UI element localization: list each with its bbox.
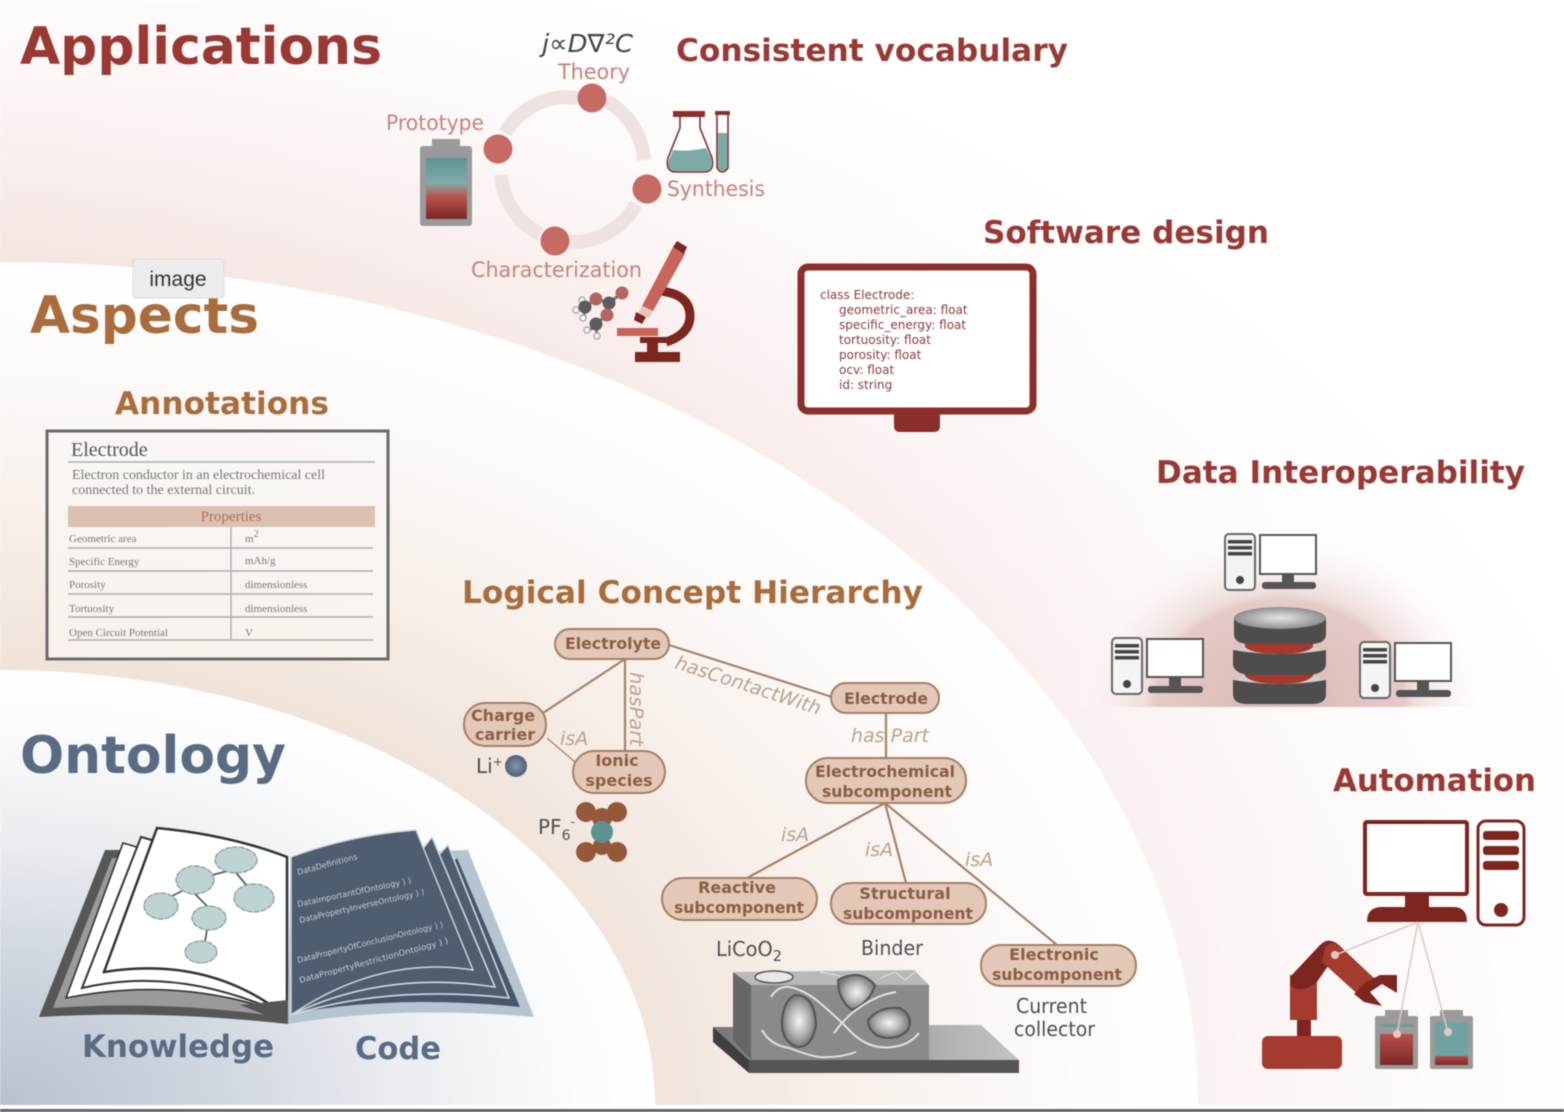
annotation card: dimensionless [245,603,307,615]
annotation card: Specific Energy [69,556,140,568]
node: Reactive subcomponent: subcomponent [674,898,804,917]
node: Ionic species [573,751,665,793]
edge label: isA structural: isA [865,839,893,861]
node: Charge carrier: Charge [471,706,535,725]
heading: Aspects: Aspects [30,286,259,346]
heading: Data Interoperability: Data Interoperability [1156,455,1525,491]
bottom edge line [0,1109,1564,1112]
icon: flask and test tube [667,111,730,172]
edge label: isA charge: isA [560,728,588,750]
icon: molecule [573,286,628,339]
icon: database [1233,607,1326,704]
annotation card: Electron conductor in an electrochemical cell [72,467,325,482]
node: Electrode [831,683,939,713]
label: Prototype: Prototype [386,111,484,135]
code listing [820,288,968,392]
heading: Ontology: Ontology [20,726,286,786]
node: Structural subcomponent: subcomponent [843,904,973,923]
icon: microscope [617,241,690,362]
panel: data interoperability [1112,455,1525,704]
knowledge graph on page [144,847,274,963]
code text on page: DataPropertyOfConclusionOntology ) ) [296,920,444,965]
edge label: has Part: has Part [851,725,931,747]
annotation card: Properties [201,509,262,525]
icon: computer top [1225,534,1316,590]
node: Reactive subcomponent: Reactive [698,878,776,897]
background: aspects band [0,262,1198,1105]
panel: automation [1262,763,1536,1069]
connections [1331,922,1452,1038]
label: LiCoO2: LiCoO [716,937,775,961]
node: Electrochemical subcomponent [806,758,966,803]
node: Electrolyte [555,629,669,659]
label: Characterization: Characterization [471,258,642,282]
node: Charge carrier: carrier [475,725,535,744]
edge label: isA reactive: isA [781,824,809,846]
book left: cover and pages [39,828,288,1024]
icon: automation monitor [1365,822,1467,922]
heading: Software design: Software design [983,215,1269,251]
label: PF6-: - [570,815,575,829]
icon: monitor stand [894,412,940,432]
label: Current collector: collector [1014,1017,1096,1041]
edge label: hasContactWith: hasContactWith [672,652,824,720]
cycle ring arcs [501,97,644,242]
label: Li+: Li [476,754,493,778]
node: Ionic species: Ionic [595,751,639,770]
code text on page: DataPropertyRestrictionOntology ) ) [298,936,449,985]
icon: PF6 molecule [576,802,627,862]
hierarchy edges [543,645,1057,945]
book right: cover and pages [288,830,534,1024]
background: data interoperability halo [1120,564,1453,708]
label: Current collector: Current [1016,994,1087,1018]
background: ontology band [0,670,655,1105]
annotation card: Electrode [71,439,148,461]
code listing: tortuosity: float [839,333,931,347]
panel: consistent vocabulary [386,29,1068,362]
node: Electrode: Electrode [844,689,928,708]
icon: computer left [1112,638,1203,694]
heading: Automation: Automation [1333,763,1536,799]
node: Electronic subcomponent: Electronic [1009,945,1099,964]
icon: battery charged [1375,1010,1418,1069]
equation: j∝D∇²C [539,29,634,58]
label: PF6-: PF [538,815,562,839]
code text on page: DataImportantOfOntology ) ) [297,876,412,909]
tooltip: image [133,259,224,298]
label: Li+: + [493,755,503,769]
code text on page [296,852,449,985]
edge label: hasPart vertical: hasPart [625,672,647,748]
label: Synthesis: Synthesis [667,177,765,201]
code text on page: DataDefinitions [296,852,358,877]
code listing: ocv: float [839,363,894,377]
annotation card: 2 [254,529,259,540]
heading: Applications: Applications [20,17,382,77]
code text on page: DataPropertyInverseOntology ) ) [298,887,425,925]
panel: logical concept hierarchy [462,575,1136,1073]
node: Electrolyte: Electrolyte [565,634,661,653]
node: Electrochemical subcomponent: Electrochemical [815,762,955,781]
node: Reactive subcomponent [662,878,817,920]
tooltip: image: image [149,268,207,291]
label: Binder: Binder [861,936,924,960]
code listing: specific_energy: float [839,318,966,332]
icon: lithium ion [505,755,527,777]
panel: software design [801,215,1269,432]
annotation card: m [245,533,254,545]
node: Structural subcomponent [831,883,986,924]
heading: Consistent vocabulary: Consistent vocabulary [676,33,1068,69]
node: Electronic subcomponent: subcomponent [992,965,1122,984]
heading: Logical Concept Hierarchy: Logical Concept Hierarchy [462,575,923,611]
panel: annotations [47,386,388,659]
code listing: class Electrode: [820,288,914,302]
annotation card: Open Circuit Potential [69,627,168,639]
annotation card: mAh/g [245,555,276,567]
code listing: geometric_area: float [839,303,968,317]
label: Code: Code [355,1031,441,1067]
label: LiCoO2: 2 [773,947,782,965]
panel: ontology book [39,828,534,1067]
annotation card: connected to the external circuit. [72,482,255,497]
annotation card: V [245,627,253,639]
annotation card [47,431,388,659]
label: Current collector [1014,994,1096,1041]
node: Electronic subcomponent [981,945,1136,986]
icon: robot arm [1262,941,1397,1069]
node: Charge carrier [464,703,546,746]
label: PF6-: 6 [562,828,571,844]
annotation card: dimensionless [245,579,307,591]
cycle nodes [484,84,662,256]
node: Electrochemical subcomponent: subcomponent [822,782,952,801]
icon: battery [420,139,472,226]
node: Ionic species: species [585,771,653,790]
heading: Annotations: Annotations [115,386,329,422]
icon: computer right [1360,642,1451,698]
annotation card: Porosity [69,579,106,591]
label: Knowledge: Knowledge [82,1029,274,1065]
edge label: isA electronic: isA [965,849,993,871]
icon: monitor [801,267,1033,411]
icon: automation tower [1478,821,1524,925]
icon: electrode block [713,970,1019,1073]
code listing: porosity: float [839,348,922,362]
label: Theory: Theory [557,60,630,84]
annotation card: Geometric area [69,533,137,545]
icon: battery discharged [1430,1010,1473,1069]
code listing: id: string [839,378,892,392]
annotation card: Tortuosity [69,603,115,615]
node: Structural subcomponent: Structural [859,884,951,903]
